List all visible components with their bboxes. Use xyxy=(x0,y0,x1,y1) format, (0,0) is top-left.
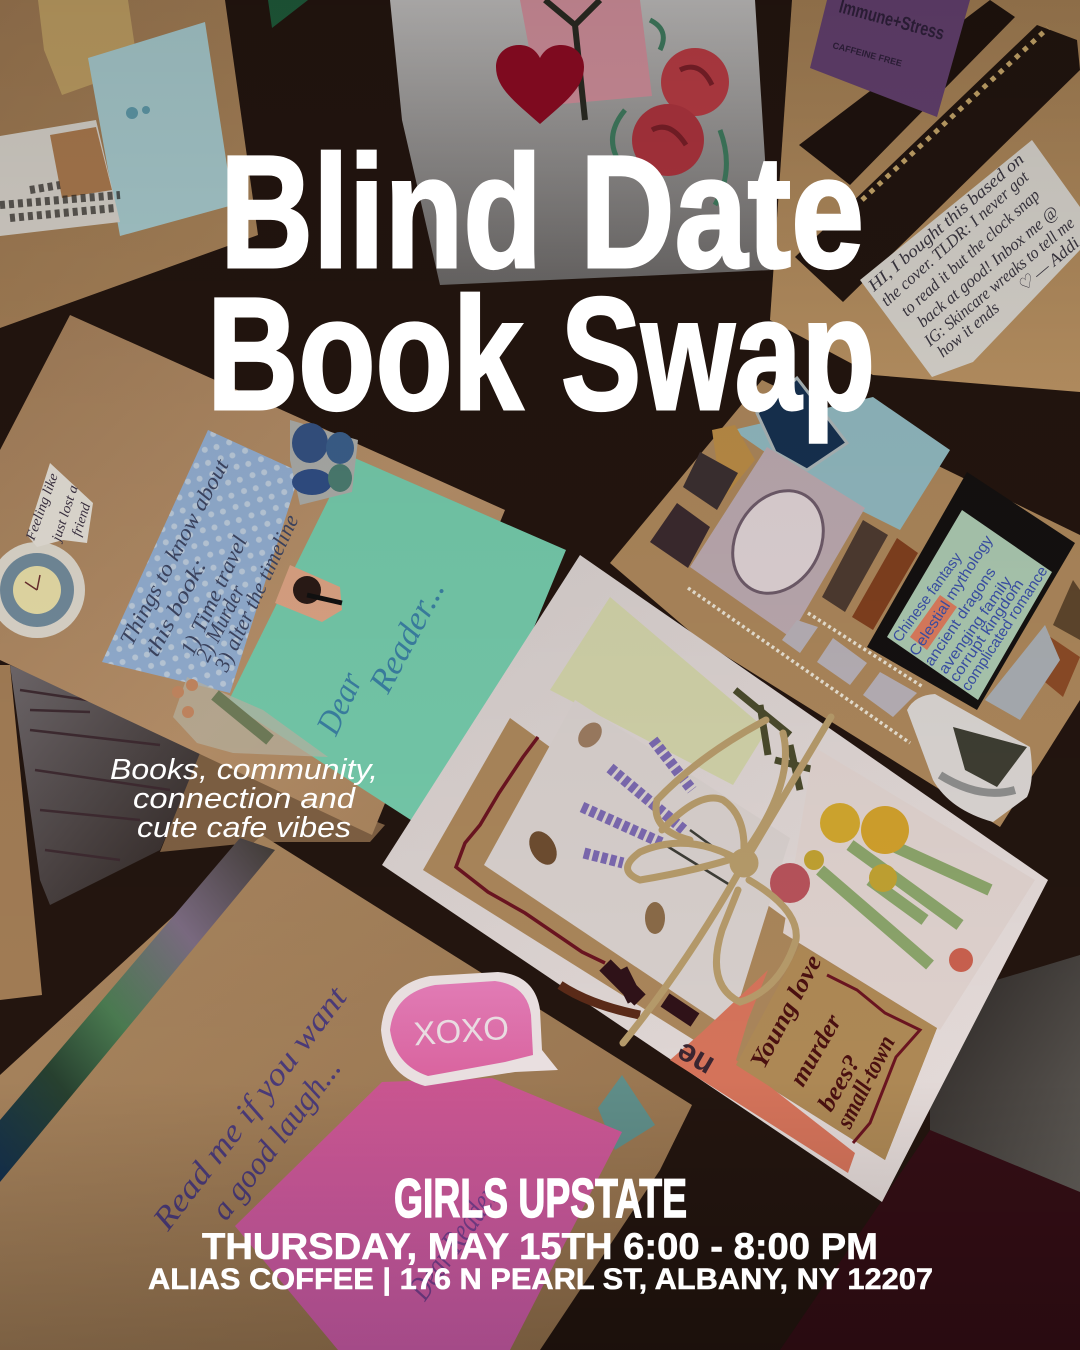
perforated strip xyxy=(688,588,923,743)
title: Date xyxy=(580,122,864,301)
phone frame note: ancient dragons xyxy=(921,564,1000,669)
phone frame note: Celestial mythology xyxy=(906,532,997,659)
handwritten note: to read it but the clock snap xyxy=(897,185,1043,320)
red squiggle border xyxy=(456,737,605,963)
package: left kraft parcel xyxy=(0,315,566,1000)
handwritten note: how it ends xyxy=(933,298,1003,361)
speech sticker: just lost a xyxy=(49,483,82,545)
mint envelope: Dear xyxy=(309,666,371,741)
kraft strip xyxy=(423,718,937,1160)
title: Book xyxy=(207,264,524,443)
leaves xyxy=(735,690,815,790)
title xyxy=(207,122,875,443)
event details xyxy=(148,1167,933,1296)
handwritten note: the cover. TLDR: I never got xyxy=(877,167,1033,310)
clock sticker xyxy=(0,542,85,638)
handwritten note xyxy=(860,140,1080,377)
package: bottom-left kraft parcel: Dear Reader xyxy=(401,1178,506,1307)
coral strip xyxy=(670,970,855,1173)
floral blue paper: 1) Time travel xyxy=(175,532,252,659)
film strip upper xyxy=(799,0,1015,185)
round lettering sticker xyxy=(757,378,847,470)
floral blue paper: Things to know about xyxy=(114,454,234,649)
package: bottom-left kraft parcel xyxy=(0,835,692,1350)
handwritten message: Read me if you want xyxy=(144,979,355,1237)
tagline xyxy=(110,754,378,844)
handwritten label: Young love xyxy=(745,951,828,1073)
floral blue paper xyxy=(102,430,303,693)
phone frame note: Chinese fantasy xyxy=(889,549,966,645)
illustrated figure sticker xyxy=(907,694,1032,822)
butterfly sticker xyxy=(290,420,358,505)
handwritten label: murder xyxy=(785,1010,847,1091)
holographic tape xyxy=(0,838,275,1182)
tea sachet xyxy=(810,0,970,117)
package: centre white parcel with twine xyxy=(382,555,1048,1202)
torn parchment xyxy=(38,0,138,95)
phone frame note: corrupt kingdom xyxy=(946,576,1027,685)
white stamped paper xyxy=(0,120,120,236)
package: right kraft parcel with stickers xyxy=(610,378,1080,827)
package: centre white parcel with twine: ne xyxy=(669,1035,720,1085)
blue paper collage xyxy=(88,22,233,236)
floral blue paper: this book: xyxy=(139,554,212,660)
phone frame note: avenging family xyxy=(935,573,1016,677)
package: top-left kraft parcel xyxy=(0,0,258,328)
handwritten label: small-town xyxy=(831,1031,901,1134)
film strip lower xyxy=(795,25,1080,302)
pale blue panel xyxy=(733,397,950,530)
pressed leaves xyxy=(560,965,695,1020)
poppy illustration xyxy=(770,747,1035,1030)
speech sticker: friend xyxy=(70,500,95,538)
holographic squares xyxy=(782,620,917,717)
floral paper xyxy=(550,597,767,785)
phone frame note: complicated romance xyxy=(958,563,1051,694)
tagline: cute cafe vibes xyxy=(137,812,351,844)
title: Swap xyxy=(561,264,875,443)
organiser name: GIRLS UPSTATE xyxy=(394,1167,687,1229)
speech sticker xyxy=(23,463,95,547)
xoxo speech bubble: XOXO xyxy=(412,1009,510,1052)
rose flowers xyxy=(612,20,729,205)
pink paper xyxy=(235,1078,622,1350)
floral blue paper: 2) Murder xyxy=(190,581,250,665)
metallic tiles xyxy=(650,452,1080,697)
handwritten label xyxy=(736,945,937,1160)
twine bow xyxy=(623,717,831,1043)
address: ALIAS COFFEE | 176 N PEARL ST, ALBANY, NY 12207 xyxy=(148,1263,933,1296)
lavender dictionary page xyxy=(484,700,790,1030)
one cent stamp sticker xyxy=(690,447,865,637)
icon: red heart xyxy=(496,45,584,124)
tagline: Books, community, xyxy=(110,754,378,786)
date and time: THURSDAY, MAY 15TH 6:00 - 8:00 PM xyxy=(202,1226,878,1267)
handwritten note: ♡ — Addi xyxy=(1013,233,1080,296)
xoxo speech bubble xyxy=(381,972,558,1086)
phone frame note xyxy=(867,472,1075,710)
handwritten label: bees? xyxy=(813,1051,866,1116)
handwritten note: back at good! Inbox me @ xyxy=(913,202,1062,331)
floral blue paper: 3) alter the timeline xyxy=(208,510,303,676)
floral tape patch xyxy=(598,1075,655,1150)
handwritten message: a good laugh... xyxy=(203,1050,348,1226)
handwritten note: HI, I bought this based on xyxy=(863,149,1028,296)
speech sticker: Feeling like xyxy=(23,471,62,543)
bookmark with tree xyxy=(275,565,342,622)
mint envelope xyxy=(228,456,566,842)
tagline: connection and xyxy=(133,783,356,815)
package: top-right kraft parcel with note xyxy=(770,0,1080,392)
pink collage square xyxy=(520,0,652,106)
package: top-centre white parcel with roses xyxy=(390,0,772,285)
pressed flower sticker xyxy=(172,677,328,757)
title: Blind xyxy=(220,122,542,301)
mint envelope: Reader... xyxy=(362,574,452,700)
tea sachet: CAFFEINE FREE xyxy=(831,40,903,68)
